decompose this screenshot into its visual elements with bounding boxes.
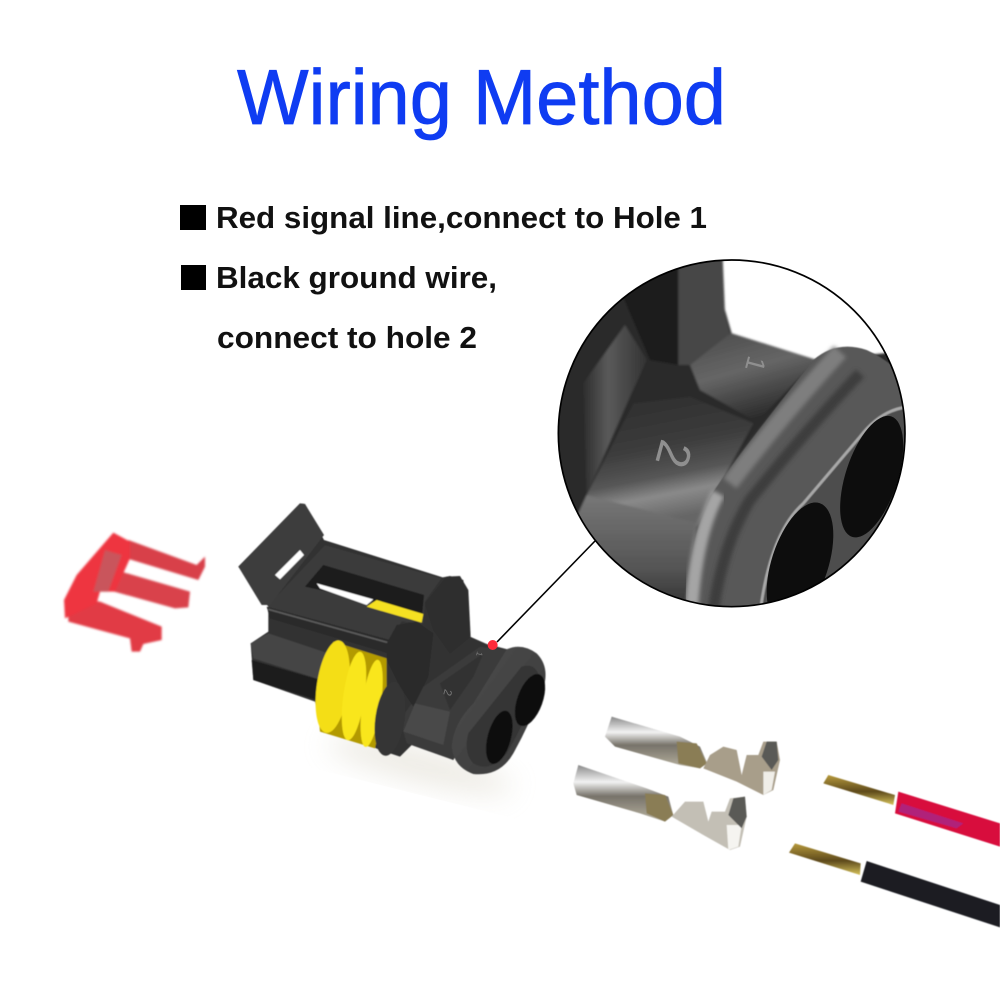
instruction: red signal line: Red signal line,connect to Hole 1: [216, 200, 707, 235]
instructions text block: [180, 200, 707, 355]
connector: number 1: 1: [474, 650, 485, 658]
metal terminals and wires: [573, 717, 1000, 927]
connector shadow: [324, 726, 516, 804]
terminal 1: [605, 717, 780, 795]
connector: plate window: [305, 565, 424, 622]
connector: front body: [400, 647, 510, 760]
connector: front arch post: [387, 622, 433, 707]
instruction: connect to hole 2: connect to hole 2: [217, 320, 477, 355]
black wire: [789, 843, 1000, 927]
connector: hole 1: [509, 670, 551, 730]
leader line: [497, 541, 595, 642]
connector: red marker dot: [488, 640, 498, 650]
red locking clip: [64, 533, 205, 652]
connector: top plate: [268, 545, 442, 647]
title: Wiring Method: [237, 53, 726, 141]
instruction: black ground wire: Black ground wire,: [216, 260, 497, 295]
lens: hole 1: [840, 416, 904, 538]
connector: rear arch post: [425, 576, 471, 653]
clip: middle arm: [108, 568, 190, 608]
lens: number 1: 1: [739, 353, 772, 375]
terminal 2: [573, 765, 747, 850]
connector: dark collar: [370, 680, 410, 758]
connector: end cap: [452, 647, 546, 774]
clip: corner: [64, 533, 130, 618]
connector: number 2: 2: [440, 688, 454, 697]
clip: top arm: [127, 540, 205, 580]
magnified detail circle: [558, 259, 906, 608]
connector: plate edge: [267, 607, 390, 653]
red wire: [823, 775, 1000, 847]
lens: hole 2: [766, 502, 834, 602]
two-pin connector: [238, 503, 551, 774]
connector: hole 2: [481, 708, 518, 767]
bullet: red line: [180, 205, 206, 230]
lens: number 2: 2: [645, 435, 702, 473]
clip: bottom arm: [68, 598, 162, 652]
connector: rear barrel: [251, 633, 333, 680]
connector: silhouette base: [238, 503, 510, 760]
bullet: black wire: [181, 265, 206, 290]
connector: yellow seal: [310, 638, 387, 748]
connector: flap: [238, 503, 324, 605]
